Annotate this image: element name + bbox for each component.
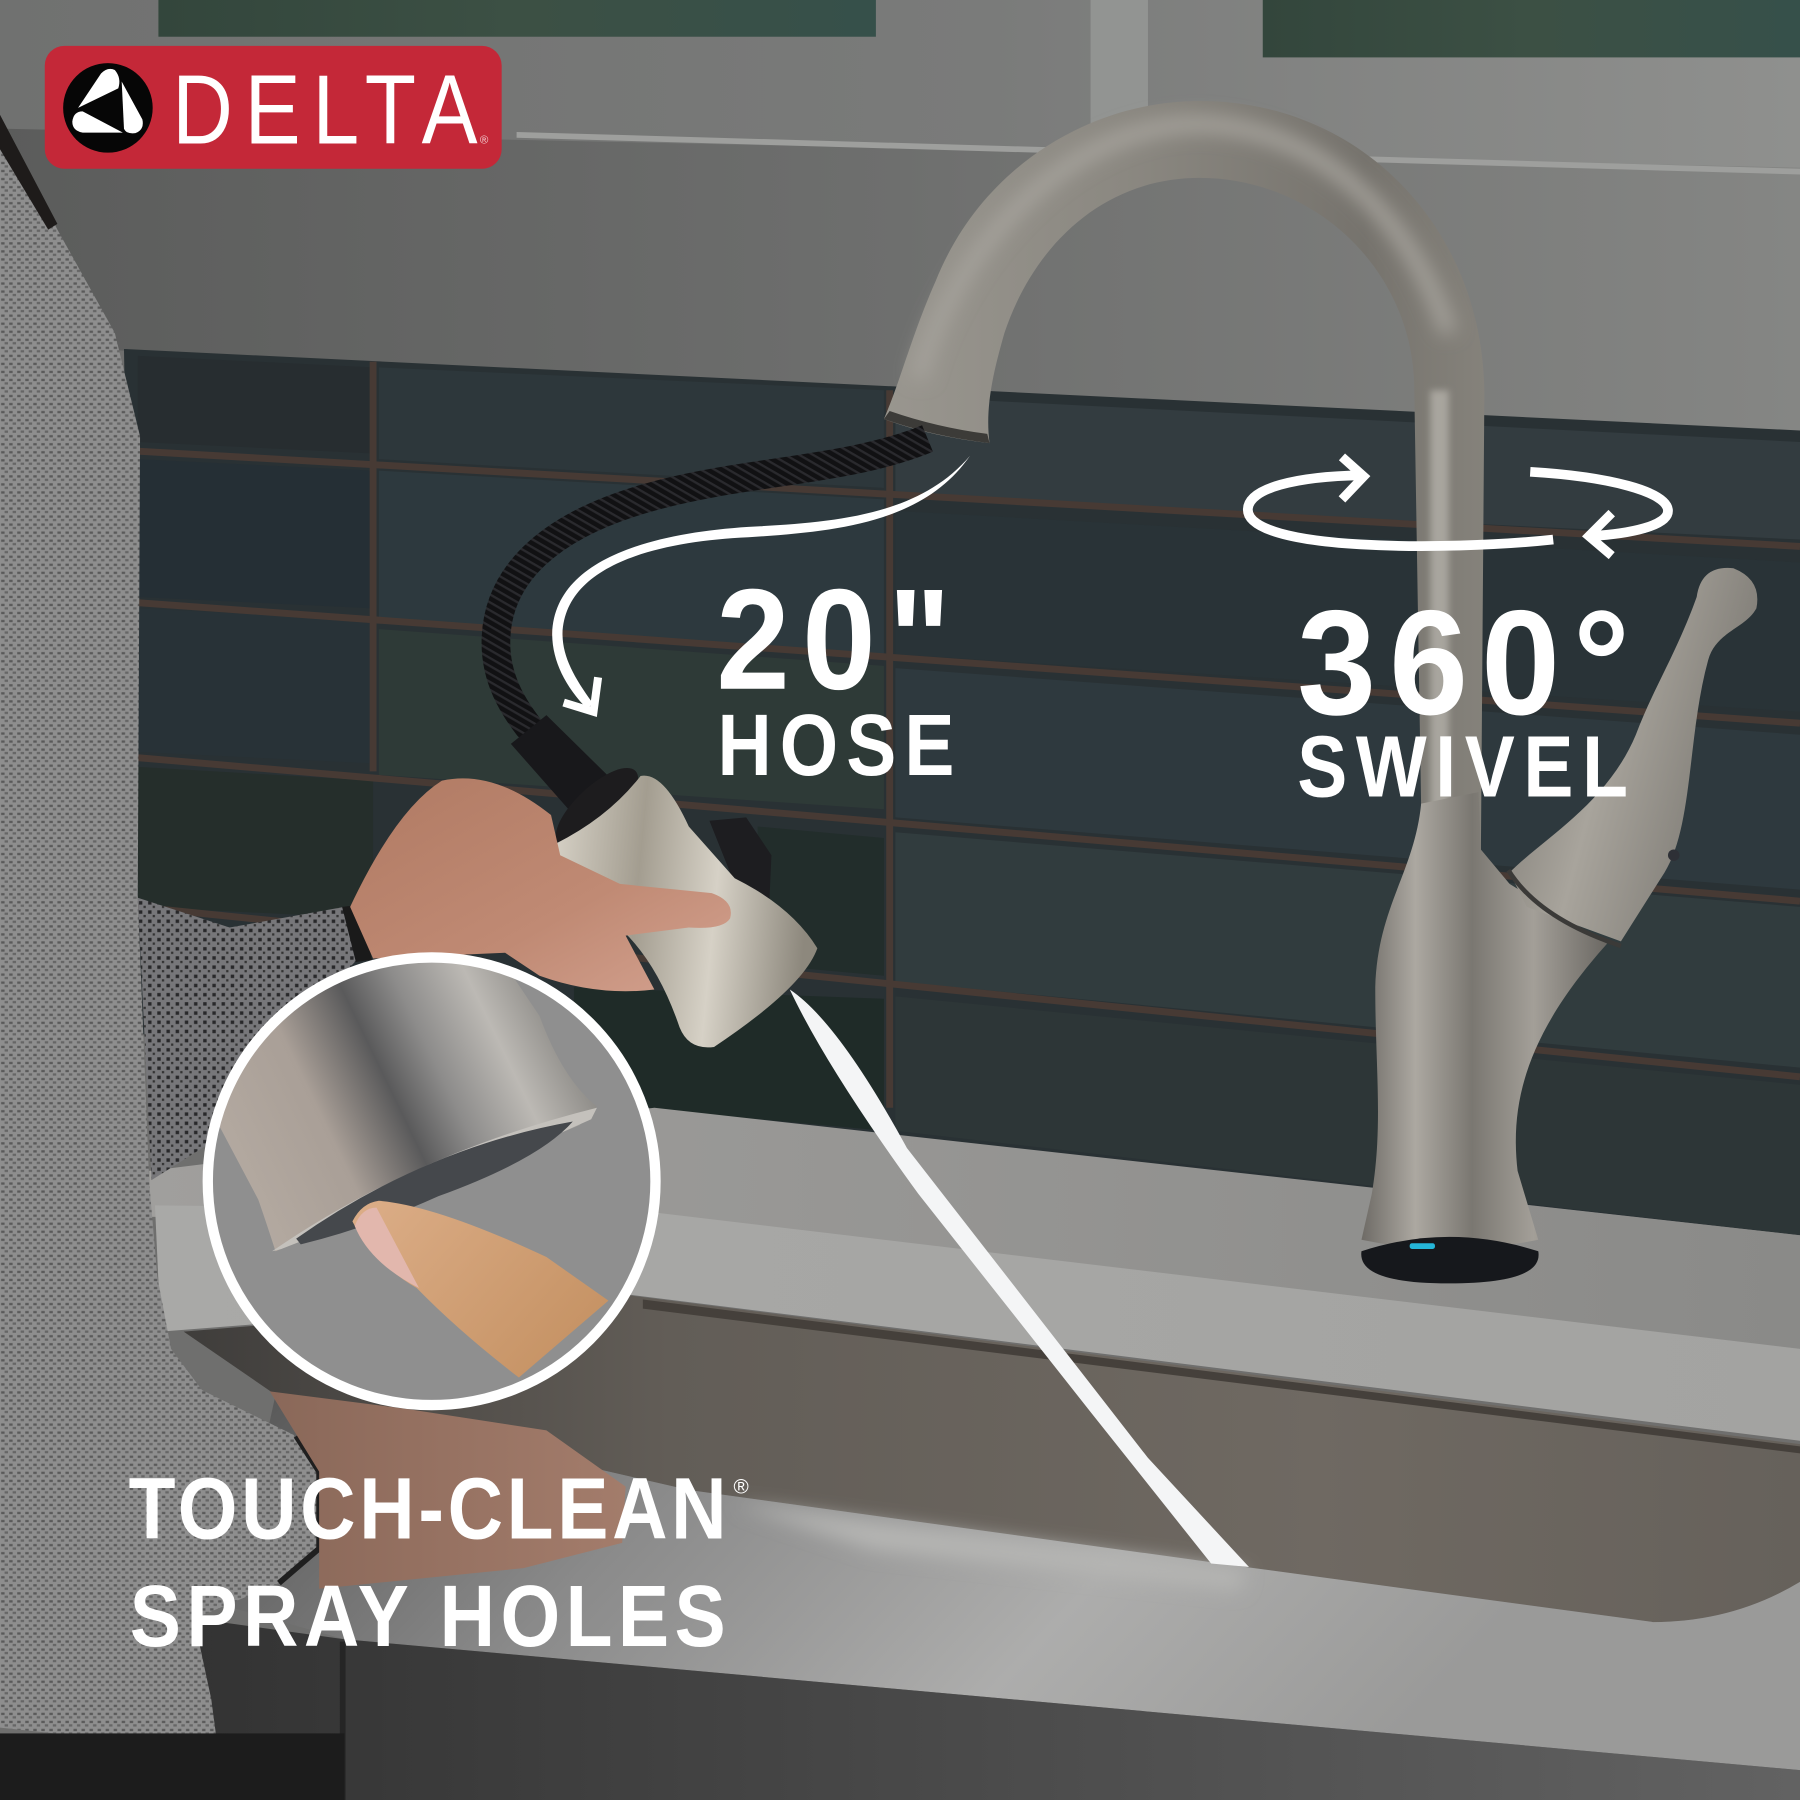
callout: 20 inch hose: 20" bbox=[716, 560, 951, 720]
spray holes bbox=[296, 1122, 573, 1244]
hand on sink edge bbox=[270, 1391, 626, 1589]
callout: 20 inch hose bbox=[716, 560, 954, 794]
black base with LED bbox=[1361, 1237, 1539, 1283]
backsplash tiles bbox=[115, 333, 1800, 1251]
callout: touch-clean spray holes: ® bbox=[734, 1475, 749, 1498]
callout: 20 inch hose: HOSE bbox=[717, 697, 954, 794]
callout: 360 degree swivel: 360° bbox=[1297, 579, 1630, 746]
sink basin bbox=[184, 1295, 1800, 1622]
fingertip bbox=[352, 1201, 608, 1378]
spout arc bbox=[884, 101, 1484, 855]
icon: Delta triangle mark bbox=[63, 63, 153, 153]
sleeve bbox=[138, 898, 358, 1180]
logo: Delta bbox=[45, 46, 502, 169]
inset circle: spray holes detail bbox=[207, 941, 655, 1405]
callout: touch-clean spray holes: TOUCH-CLEAN bbox=[129, 1461, 727, 1557]
hose length arrow bbox=[552, 456, 970, 712]
spray head bbox=[220, 962, 587, 1252]
lower cabinet bbox=[195, 1619, 1800, 1800]
logo: Delta: ® bbox=[480, 134, 489, 146]
lever handle bbox=[1510, 568, 1757, 941]
person: jacket bbox=[0, 115, 372, 1800]
grout lines bbox=[138, 362, 1800, 1108]
360 swivel arrows bbox=[1248, 457, 1668, 556]
callout: 360 degree swivel: SWIVEL bbox=[1297, 718, 1628, 816]
hand holding wand bbox=[350, 778, 731, 991]
callout: touch-clean spray holes bbox=[129, 1461, 749, 1665]
faucet bbox=[884, 101, 1757, 1283]
logo: Delta: DELTA bbox=[172, 55, 478, 165]
spray wand bbox=[556, 776, 817, 1047]
callout: touch-clean spray holes: SPRAY HOLES bbox=[130, 1569, 726, 1665]
water stream bbox=[790, 990, 1249, 1567]
jacket cuff bbox=[279, 1436, 319, 1583]
counter and sink bbox=[149, 1108, 1800, 1800]
faucet body bbox=[1361, 792, 1607, 1249]
pull-down hose bbox=[496, 439, 928, 858]
sink front rim bbox=[230, 1395, 1800, 1770]
